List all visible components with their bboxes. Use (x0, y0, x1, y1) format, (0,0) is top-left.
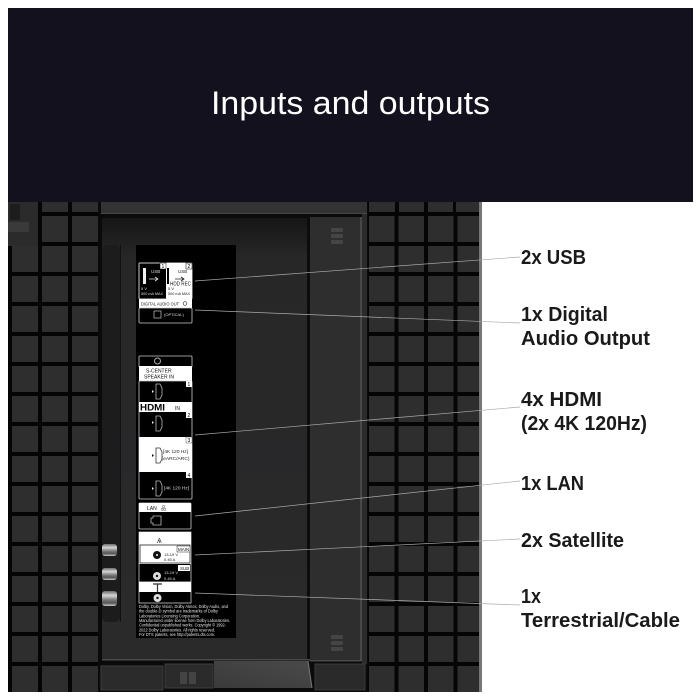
port group: S-center speaker in: S-CENTER (146, 368, 172, 374)
screw slots: lower (331, 635, 343, 651)
legal text: the double-D symbol are trademarks of Dolby (139, 609, 219, 614)
terminal recess (98, 202, 368, 692)
label: LAN: 1x LAN (521, 473, 584, 495)
port group: HDMI: IN (175, 406, 180, 412)
port group: USB: 5 V (141, 286, 147, 291)
leader line: HDMI (195, 407, 520, 435)
port group: LAN: LAN (147, 506, 157, 512)
label: HDMI: 4x HDMI (521, 389, 602, 411)
port group: USB: USB (178, 269, 187, 274)
label: terrestrial/cable: 1x (521, 586, 541, 608)
port group: HDMI: [4K 120 Hz] (164, 486, 189, 490)
port group: HDMI: (eARC/ARC) (162, 456, 190, 461)
port group: HDMI: 4 (188, 473, 190, 479)
port group: USB: 500 mA MAX (168, 291, 190, 296)
legal text: Dolby, Dolby Vision, Dolby Atmos, Dolby Audio, and (139, 604, 228, 609)
legal text (139, 604, 230, 637)
port group: USB: USB (151, 269, 160, 274)
port group: satellite (139, 532, 191, 582)
label: terrestrial/cable: Terrestrial/Cable (521, 610, 680, 632)
label: HDMI (521, 389, 647, 435)
port group: LAN: 品 (161, 506, 166, 512)
panel: terminal label (136, 245, 236, 638)
port group: HDMI: 3 (188, 438, 190, 444)
vent grid: right (365, 202, 479, 692)
header banner (8, 8, 693, 202)
leader line: LAN (195, 481, 520, 516)
port group: digital audio out: (OPTICAL) (164, 312, 184, 317)
label: HDMI: (2x 4K 120Hz) (521, 413, 647, 435)
title: Inputs and outputs (211, 85, 490, 121)
screw slots: upper (331, 228, 343, 244)
side connector lips (102, 544, 117, 606)
leader line: satellite (195, 539, 520, 555)
port group: HDMI: 1 (188, 382, 190, 388)
legal text: Confidential unpublished works. Copyright © 1992- (139, 623, 226, 628)
port group: terrestrial/cable (139, 582, 191, 603)
legal text: For DTS patents, see http://patents.dts.com. (139, 632, 215, 637)
label: terrestrial/cable (521, 586, 680, 632)
leader line: terrestrial (195, 593, 520, 605)
photo: TV rear panel (8, 202, 482, 692)
leader line: digital audio (195, 310, 520, 323)
stand foot (101, 661, 365, 690)
label: satellite: 2x Satellite (521, 530, 624, 552)
port group: USB: 500 mA MAX (141, 291, 163, 296)
label: digital audio output (521, 304, 650, 350)
port group: HDMI: HDMI (140, 402, 165, 412)
port group: satellite: 13-19 V (164, 570, 178, 575)
port group: USB (139, 263, 192, 299)
port group: satellite: 0.45 A (164, 576, 176, 581)
port group: HDMI: [4K 120 Hz] (163, 449, 188, 454)
label: digital audio output: Audio Output (521, 328, 650, 350)
port group: satellite: 13-19 V (164, 552, 178, 557)
port group: satellite: MAIN (178, 547, 189, 552)
legal text: 2022 Dolby Laboratories. All rights reserved. (139, 627, 215, 632)
port group: LAN (139, 503, 191, 529)
port group: USB: 2 (188, 264, 190, 270)
port group: S-center speaker in (139, 356, 192, 381)
port group: digital audio out (139, 299, 192, 323)
vent grid: left (8, 202, 102, 692)
port group: satellite: 0.45 A (164, 557, 176, 562)
port group: USB: HDD REC (170, 282, 191, 288)
port group: HDMI (139, 381, 192, 499)
port group: satellite: SUB (180, 566, 189, 571)
port group: USB: 5 V (168, 286, 174, 291)
legal text: Manufactured under license from Dolby Laboratories. (139, 618, 230, 623)
label: USB: 2x USB (521, 247, 586, 269)
leader line: USB (195, 257, 520, 281)
port group: HDMI: 2 (188, 413, 190, 419)
port group: S-center speaker in: SPEAKER IN (144, 374, 174, 380)
port group: USB: 1 (162, 264, 164, 270)
label: digital audio output: 1x Digital (521, 304, 608, 326)
port group: digital audio out: DIGITAL AUDIO OUT (141, 302, 179, 306)
port group: satellite: Ѧ (157, 538, 162, 545)
legal text: Laboratories Licensing Corporation. (139, 613, 200, 618)
